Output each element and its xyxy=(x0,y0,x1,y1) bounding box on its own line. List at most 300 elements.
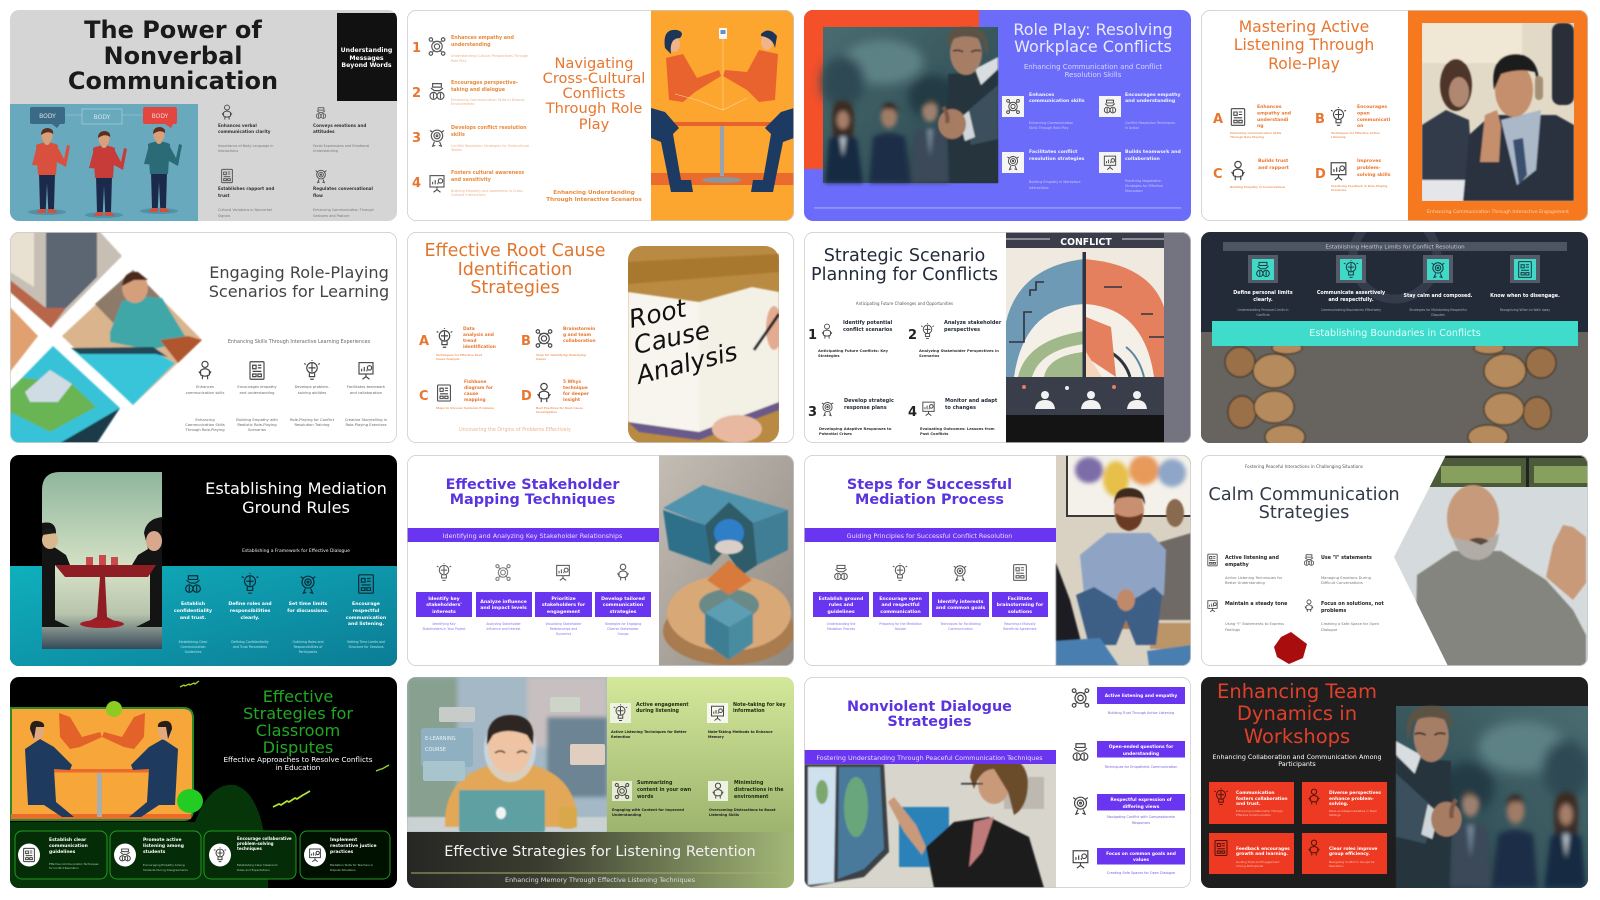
item C: Fishbone xyxy=(464,379,487,385)
item: flow: Regulates conversational xyxy=(313,186,374,191)
column: empathy xyxy=(236,362,278,432)
item 2 xyxy=(412,80,525,106)
column: brainstorming xyxy=(992,565,1048,631)
column: time limits: Responsibilities of xyxy=(294,645,323,649)
column: ground rules: Establish ground xyxy=(819,596,863,602)
column: open communication xyxy=(873,563,929,631)
red hexagon xyxy=(1274,632,1307,664)
column: brainstorming: Reaching a Mutually xyxy=(1004,622,1036,626)
slide: Enhancing Team Dynamics xyxy=(1201,677,1590,888)
item: steady tone: Using "I" Statements to Express xyxy=(1225,622,1284,626)
item: summarizing xyxy=(612,780,692,817)
column: tailored: Develop tailored xyxy=(601,596,645,602)
column: confidentiality: Establishing Clear xyxy=(179,640,208,644)
item: listening: empathy xyxy=(1225,562,1250,568)
item 1: Strategies xyxy=(818,354,840,358)
item 1: 1 xyxy=(808,328,817,343)
column: roles: Define roles and xyxy=(228,601,272,607)
illustration: diamond collage xyxy=(10,232,202,443)
item 4: Cultural Interactions xyxy=(451,193,486,197)
column: interests: Techniques for Facilitating xyxy=(939,622,981,626)
title: Listening Through xyxy=(1234,36,1374,54)
column: influence: and impact levels xyxy=(480,605,527,611)
item 4: Fosters cultural awareness xyxy=(451,170,524,176)
item C: cause xyxy=(464,392,478,397)
item A: Cause Analysis xyxy=(436,357,460,361)
title: Effective Root Cause xyxy=(424,241,606,261)
subtitle: Resolution Skills xyxy=(1065,71,1122,79)
item: common goals xyxy=(1073,848,1185,875)
item: verbal clarity: Interactions xyxy=(218,149,238,153)
column: time limits: Set time limits xyxy=(289,601,328,607)
item 3: Develops conflict resolution xyxy=(451,125,527,131)
item: distractions: distractions in the xyxy=(734,787,784,793)
item: note-taking: information xyxy=(733,708,765,714)
card: clear roles: Navigating Conflict in Groups for xyxy=(1329,860,1376,864)
card: feedback: Guiding Trust and Engagement xyxy=(1236,860,1280,864)
band xyxy=(804,750,1056,764)
title: Dynamics in xyxy=(1237,702,1357,725)
item 1: Enhances empathy and xyxy=(451,35,514,41)
item: emotions: Understanding xyxy=(313,149,338,153)
item: empathy: Encourages empathy xyxy=(1125,92,1181,98)
item: engagement: Active Listening Techniques for Better xyxy=(611,730,687,734)
item B: g and team xyxy=(563,332,591,338)
card: collaboration: fosters collaboration xyxy=(1236,796,1288,802)
column: influence: Influence and Interest xyxy=(487,627,521,631)
photo: mediation circle xyxy=(1056,455,1191,666)
subtitle: Fostering Peaceful Interactions in Challenging Situations xyxy=(1245,464,1363,469)
column: listening: Setting Time Limits and xyxy=(347,640,385,644)
column: communicate: Communicating Boundaries Effectively xyxy=(1321,308,1381,312)
item 4 xyxy=(412,170,524,197)
item: steady tone xyxy=(1208,601,1288,632)
card: feedback xyxy=(1209,833,1294,874)
tagline panel: Beyond Words xyxy=(341,62,392,69)
card: perspectives: solving. xyxy=(1329,801,1349,807)
item: open questions xyxy=(1073,741,1185,769)
column: interests: stakeholders' xyxy=(426,602,462,608)
item: communication skills: Enhancing Communication xyxy=(1029,121,1073,125)
title: Enhancing Team xyxy=(1217,680,1377,703)
item: verbal clarity: Importance of Body Language in xyxy=(218,144,273,148)
column: brainstorming: brainstorming for xyxy=(997,602,1044,608)
item: conflict strategies: Facilitates conflict xyxy=(1029,149,1078,155)
item: engagement xyxy=(610,702,689,739)
item: empathy: and understanding xyxy=(1125,98,1175,104)
card: clear roles: Clear roles improve xyxy=(1329,846,1377,852)
title: Effective Stakeholder xyxy=(446,477,620,493)
title: Establishing Mediation xyxy=(205,479,387,498)
card: guidelines xyxy=(15,831,107,879)
band: Guiding Principles for Successful Conflict Resolution xyxy=(847,532,1012,540)
item: teamwork: Discussion xyxy=(1125,189,1143,193)
column: prioritize: engagement xyxy=(547,609,581,615)
column: limits: Define personal limits xyxy=(1233,290,1293,296)
item 2: Enhancing Communication Skills in Diverse xyxy=(451,98,525,102)
bottom band: Enhancing Memory Through Effective Listening Techniques xyxy=(505,876,696,884)
item: teamwork: Practicing Negotiation xyxy=(1125,179,1161,183)
card: restorative justice xyxy=(300,831,390,879)
column: interests: Identify interests xyxy=(938,599,984,605)
illustration: three people with body speech bubbles xyxy=(10,104,198,221)
top banner: Establishing Healthy Limits for Conflict Resolution xyxy=(1325,244,1465,250)
column: calm: Stay calm and composed. xyxy=(1403,293,1473,299)
item: note-taking xyxy=(707,702,786,739)
item B: communicati xyxy=(1357,117,1391,123)
item: conflict strategies xyxy=(1002,149,1085,190)
photo: root cause notebook xyxy=(626,246,782,443)
subtitle: Effective Approaches to Resolve Conflicts xyxy=(224,755,373,764)
slide: Establishing Boundaries in Conflicts xyxy=(1201,215,1588,449)
illustration: three people with body speech bubbles: BODY xyxy=(94,114,111,121)
subtitle: in Education xyxy=(276,763,320,772)
title: Ground Rules xyxy=(242,498,350,517)
column: communication: Enhances xyxy=(196,385,214,389)
item: solutions: Creating a Safe Space for Open xyxy=(1321,622,1380,626)
footer text: Through Interactive Scenarios xyxy=(546,197,642,203)
column: teamwork: and collaboration xyxy=(350,391,383,395)
illustration: three people with body speech bubbles: BODY xyxy=(152,113,169,120)
item 3: Conflict Resolution Strategies for Multicultural xyxy=(451,144,529,148)
item: engagement: during listening xyxy=(636,708,680,714)
item: communication skills: Enhances xyxy=(1029,92,1054,98)
item: distractions: Listening Skills xyxy=(709,813,739,817)
photo: 3D blocks xyxy=(659,455,795,666)
column: interests xyxy=(932,566,989,631)
item: common goals: Focus on common goals and xyxy=(1106,851,1176,857)
item: empathy: Conflict Resolution Techniques xyxy=(1125,121,1175,125)
item C: Building Empathy in Conversations xyxy=(1230,185,1286,189)
column: limits xyxy=(1233,255,1293,317)
item 3: 3 xyxy=(412,131,421,146)
item: summarizing: Summarizing xyxy=(637,780,673,786)
photo: child with laptop: COURSE xyxy=(425,747,446,753)
squiggles xyxy=(180,681,389,807)
item D: Scenarios xyxy=(1331,188,1347,192)
photo: wooden pieces on wood xyxy=(1201,332,1588,449)
column: communication: Through Role-Playing xyxy=(184,428,225,432)
item: rapport: Signals xyxy=(218,214,230,218)
slide: Steps for Successful Mediation xyxy=(804,455,1191,666)
item: distractions: Minimizing xyxy=(734,780,764,786)
item B: open xyxy=(1357,112,1370,116)
item 2: Encourages perspective- xyxy=(451,80,518,86)
item 3 xyxy=(808,398,894,436)
title: Nonviolent Dialogue xyxy=(847,699,1012,715)
item 3: Developing Adaptive Responses to xyxy=(819,427,892,431)
item B: B xyxy=(521,334,531,349)
item 1 xyxy=(412,35,528,63)
photo: root cause notebook: Analysis xyxy=(631,337,740,390)
card: feedback: Feedback encourages xyxy=(1236,846,1290,852)
item: engagement: Retention xyxy=(611,735,631,739)
item: open questions: understanding xyxy=(1123,751,1159,757)
card: listening xyxy=(110,831,201,879)
item: empathy xyxy=(1099,92,1181,130)
item D xyxy=(1315,158,1391,192)
card: collaboration: Enhancing Collaboration Through xyxy=(1236,809,1283,813)
band: Fostering Understanding Through Peaceful Communication Techniques xyxy=(816,754,1043,762)
item: rapport: Cultural Variations in Nonverbal xyxy=(218,208,272,212)
bottom band: Effective Strategies for Listening Retention xyxy=(444,844,756,860)
subtitle: Participants xyxy=(1278,760,1316,768)
item: listening xyxy=(1208,554,1283,585)
card: guidelines: Establish clear xyxy=(49,837,87,843)
item: respectful expression: Respectful expression of xyxy=(1110,797,1172,803)
item C: C xyxy=(1213,167,1223,182)
illustration: conflict poster: CONFLICT xyxy=(1060,237,1112,248)
item 1: Identify potential xyxy=(843,320,893,326)
decorative arc xyxy=(1353,215,1437,299)
item D: Investigation xyxy=(536,410,557,414)
slide: Role Play Resolving Workplace Conflicts xyxy=(804,10,1191,221)
item: emotions: Facial Expressions and Emotional xyxy=(313,144,369,148)
item B xyxy=(521,326,596,361)
item 3: response plans xyxy=(844,405,887,411)
title band: Establishing Boundaries in Conflicts xyxy=(1309,328,1481,339)
item: steady tone: Maintain a steady tone xyxy=(1225,601,1288,607)
band xyxy=(804,528,1056,542)
item 1: Role Play xyxy=(451,59,466,63)
photo: man gesturing xyxy=(1391,455,1588,666)
item: flow: Enhancing Communication Through xyxy=(313,208,374,212)
column: limits: Understanding Personal Limits in xyxy=(1238,308,1289,312)
column: influence xyxy=(476,565,532,631)
item: flow xyxy=(313,170,374,218)
illustration: three people with body speech bubbles: BODY xyxy=(39,113,56,120)
column: ground rules xyxy=(813,565,869,631)
card: restorative justice: Dispute Situations xyxy=(330,868,356,872)
item: rapport: Establishes rapport and xyxy=(218,186,274,191)
photo: pointing man xyxy=(821,27,998,183)
item: empathy: in Action xyxy=(1125,126,1139,130)
column: teamwork xyxy=(345,363,388,427)
column: interests: Communication xyxy=(948,627,973,631)
column: confidentiality: Establish xyxy=(181,601,205,607)
item B: collaboration xyxy=(563,338,596,344)
item D: D xyxy=(1315,167,1326,182)
item: solutions: problems xyxy=(1321,608,1346,614)
column: roles: and Trust Parameters xyxy=(233,645,267,649)
item A: trend xyxy=(463,338,477,344)
card: perspectives: Roles and Responsibilities in Team xyxy=(1329,809,1377,813)
column: prioritize: Prioritize xyxy=(551,596,576,602)
item D: technique xyxy=(563,385,588,391)
card: perspectives: Settings xyxy=(1329,813,1341,817)
card: restorative justice: Mediation Skills for Teachers in xyxy=(330,863,373,867)
photo: child with laptop xyxy=(407,677,607,832)
illustration: two men at table xyxy=(42,472,162,649)
item 4: and sensitivity xyxy=(451,177,492,183)
item: engagement: Active engagement xyxy=(636,702,689,708)
item A: Through Role-Playing xyxy=(1230,135,1264,139)
column: empathy: and understanding xyxy=(240,391,274,395)
item B: Tools for Identifying Underlying xyxy=(536,353,586,357)
item: summarizing: Understanding xyxy=(612,813,642,817)
column: open communication: Preparing for the Mediation xyxy=(879,622,922,626)
item: solutions: Dialogue xyxy=(1321,628,1338,632)
card: feedback: Among Participants xyxy=(1236,864,1264,868)
item: note-taking: Note-Taking Methods to Enhance xyxy=(708,730,773,734)
item: emotions: attitudes xyxy=(313,129,335,134)
item C: diagram for xyxy=(464,385,494,391)
item: communication skills: Skills Through Role-Play xyxy=(1029,126,1068,130)
title: Planning for Conflicts xyxy=(811,265,998,285)
title: Workplace Conflicts xyxy=(1014,37,1172,56)
column: brainstorming: Facilitate xyxy=(1008,596,1032,602)
item: listening: Active listening and xyxy=(1225,555,1279,561)
column: listening xyxy=(346,575,386,649)
column: problem solving: solving abilities xyxy=(298,391,326,395)
item: common goals: Creating Safe Spaces for Open Dialogue xyxy=(1107,871,1175,875)
item C: Steps to Uncover Systemic Problems xyxy=(436,406,494,410)
column: interests: and common goals xyxy=(936,605,985,611)
column: roles: responsibilities xyxy=(230,608,270,614)
title: Play xyxy=(579,116,610,133)
item B: Listening xyxy=(1331,135,1346,139)
card: feedback: growth and learning. xyxy=(1236,851,1288,857)
item: I statements: Use "I" statements xyxy=(1321,555,1372,561)
item: rapport: trust xyxy=(218,193,230,198)
item B: on xyxy=(1357,124,1363,129)
slide: Nonviolent Dialogue Strategies xyxy=(804,677,1191,888)
column: communicate xyxy=(1317,255,1386,312)
slide: Establishing Mediation Ground Rules xyxy=(10,455,397,666)
column: prioritize: stakeholders for xyxy=(542,602,586,608)
card: listening: listening among xyxy=(143,843,184,849)
item 4: Monitor and adapt xyxy=(945,398,998,404)
item: communication skills xyxy=(1002,92,1085,130)
item A: Enhances xyxy=(1257,104,1282,110)
item: active listening xyxy=(1072,687,1185,715)
top banner xyxy=(1223,242,1567,251)
item: respectful expression: Navigating Conflict with Compassionate xyxy=(1107,815,1175,819)
card: guidelines: guidelines xyxy=(49,849,76,855)
item 2: Environments xyxy=(451,102,475,106)
card: guidelines: for Conflict Resolution xyxy=(49,866,79,870)
item D: insight xyxy=(563,397,580,403)
band: Identifying and Analyzing Key Stakeholder Relationships xyxy=(443,532,623,540)
title: Communication xyxy=(68,67,278,95)
illustration: conflict poster xyxy=(1006,232,1191,443)
item: conflict strategies: Building Empathy in Workplace xyxy=(1029,180,1080,184)
item 1: Anticipating Future Conflicts: Key xyxy=(818,349,889,353)
item 1: conflict scenarios xyxy=(843,327,892,333)
title: Through Role xyxy=(545,100,642,117)
column: limits: clearly. xyxy=(1253,297,1273,303)
slide: The Power of Nonverbal Communication xyxy=(10,10,397,221)
title: Strategies xyxy=(470,278,560,298)
column: communication: Communication Skills xyxy=(185,423,225,427)
photo: pointing man mirrored xyxy=(1396,706,1590,888)
slide: Strategic Scenario Planning xyxy=(804,232,1191,443)
title: Identification xyxy=(458,260,572,280)
column: time limits: for discussions. xyxy=(287,608,329,614)
column: tailored: Strategies for Engaging xyxy=(605,622,641,626)
slide: Engaging Role-Playing Scenarios xyxy=(10,232,397,443)
card: collaboration: and trust. xyxy=(1236,801,1261,807)
item D: 5 Whys xyxy=(563,379,581,385)
card: problem solving: Establishing Clear Classroom xyxy=(237,863,278,867)
card: guidelines: communication xyxy=(49,843,88,849)
item B: Issues xyxy=(536,357,546,361)
item: distractions xyxy=(708,780,784,817)
column: roles: clearly. xyxy=(240,615,260,621)
item: active listening: Active listening and empathy xyxy=(1105,693,1177,699)
item D: Best Practices for Root Cause xyxy=(536,406,583,410)
item: distractions: environment xyxy=(734,794,769,800)
item: active listening: Building Trust Through Active Listening xyxy=(1108,711,1174,715)
item A: analysis and xyxy=(463,332,494,338)
column: open communication: and respectful xyxy=(881,602,920,608)
column: communicate: and respectfully. xyxy=(1328,297,1374,303)
title: Effective xyxy=(263,687,333,706)
column: tailored: strategies xyxy=(610,609,637,615)
photo: root cause notebook: Cause xyxy=(631,315,713,360)
item: I statements xyxy=(1304,555,1372,585)
item D: for deeper xyxy=(563,391,590,397)
slide: Effective Root Cause Identification xyxy=(407,232,794,443)
item D: solving skills xyxy=(1357,172,1391,178)
item: conflict strategies: resolution strategies xyxy=(1029,156,1085,162)
item: flow: Gestures and Posture xyxy=(313,214,349,218)
slide: Effective Strategies for Listening Retention xyxy=(407,677,794,888)
item A xyxy=(1213,104,1291,139)
subtitle: Enhancing Communication and Conflict xyxy=(1024,63,1162,71)
column: brainstorming: solutions xyxy=(1008,609,1032,615)
item D: D xyxy=(521,389,532,404)
item: distractions: Overcoming Distractions to Boost xyxy=(709,808,776,812)
item: note-taking: Note-taking for key xyxy=(733,702,786,708)
item A: identification xyxy=(463,344,496,350)
photo: root cause notebook: Root xyxy=(626,293,690,334)
item D xyxy=(521,379,590,414)
green glow xyxy=(10,785,268,888)
title: Conflicts xyxy=(563,85,625,102)
title: Engaging Role-Playing xyxy=(209,263,389,282)
column: time limits xyxy=(287,576,329,654)
item B: Encourages xyxy=(1357,104,1387,110)
item: teamwork: collaboration xyxy=(1125,156,1160,162)
item 3 xyxy=(412,125,529,152)
column: empathy: Scenarios xyxy=(248,428,266,432)
column: teamwork: Creative Storytelling in xyxy=(345,418,388,422)
item: communication skills: communication skills xyxy=(1029,98,1085,104)
photo: woman at map screen xyxy=(804,753,1056,888)
slide: Effective Strategies for Classroom Disputes xyxy=(10,677,397,888)
item C xyxy=(419,379,494,410)
column: interests xyxy=(416,563,472,631)
card: listening: students xyxy=(143,849,166,855)
title: Workshops xyxy=(1244,725,1350,748)
column: teamwork: Role-Playing Exercises xyxy=(345,423,387,427)
column: prioritize: Dynamics xyxy=(556,632,572,636)
column: disengage: Recognizing When to Walk Away xyxy=(1500,308,1550,312)
item C: mapping xyxy=(464,397,486,403)
item: verbal clarity: Enhances verbal xyxy=(218,123,257,128)
card: listening: Students During Disagreements xyxy=(143,868,188,872)
item: summarizing: content in your own xyxy=(637,787,692,793)
item 2: Scenarios xyxy=(919,354,940,358)
item D: Improves xyxy=(1357,158,1381,164)
column: open communication: Session xyxy=(895,627,906,631)
title: The Power of xyxy=(84,16,262,44)
column: communication xyxy=(184,361,225,432)
item: conflict strategies: Interactions xyxy=(1029,186,1049,190)
item 1 xyxy=(808,320,893,358)
column: interests: Identify key xyxy=(428,596,460,602)
